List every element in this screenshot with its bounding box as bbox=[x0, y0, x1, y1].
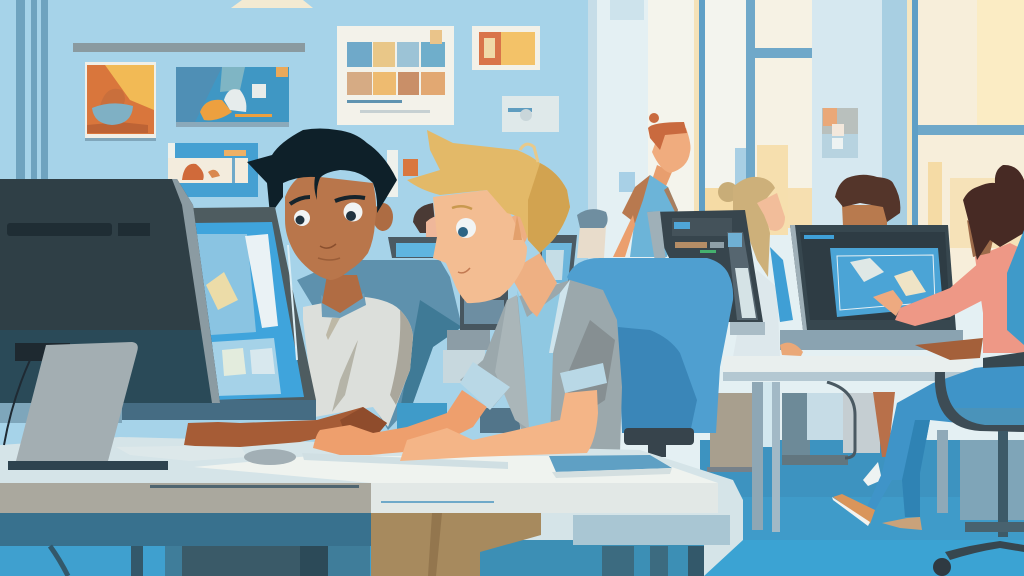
person: seated woman with blonde bun bbox=[718, 177, 793, 357]
hair bbox=[407, 130, 570, 253]
poster: swatches chart bbox=[337, 26, 454, 125]
poster: blue landscape bbox=[176, 67, 289, 127]
middle-right monitor: gallery screen bbox=[647, 210, 765, 335]
mid background chair behind dark-haired man bbox=[297, 260, 462, 431]
person: dark-haired man bbox=[247, 128, 413, 427]
shirt bbox=[303, 297, 413, 427]
trousers bbox=[371, 513, 541, 576]
right desk bbox=[723, 343, 973, 381]
window area bbox=[588, 0, 1024, 470]
ear bbox=[506, 215, 528, 247]
dark-haired man's arm bbox=[184, 407, 387, 447]
poster: orange bowl bbox=[85, 62, 156, 141]
blond man's near arm bbox=[340, 390, 487, 455]
large foreground monitor bbox=[0, 179, 220, 470]
neck bbox=[513, 253, 557, 317]
person: woman in pink pointing at screen bbox=[832, 165, 1024, 530]
floor bbox=[0, 440, 1024, 576]
main desk bbox=[0, 437, 743, 576]
small wall accents bbox=[387, 108, 858, 197]
head bbox=[433, 190, 527, 303]
leg with brown calf behind bbox=[873, 392, 895, 457]
poster: orange squares bbox=[472, 26, 540, 70]
hair bbox=[247, 128, 397, 215]
office chair: blue foreground bbox=[567, 258, 733, 457]
person: curly-haired man bbox=[835, 175, 900, 226]
large monitor: map screen bbox=[780, 225, 963, 350]
eyes bbox=[294, 210, 310, 226]
center monitor: design software bbox=[121, 207, 316, 420]
right desk lower stuff bbox=[707, 382, 1024, 532]
distant people behind monitors bbox=[413, 203, 608, 258]
blond man's far arm bbox=[400, 390, 598, 461]
legs under desk bbox=[131, 546, 143, 576]
person: standing woman bbox=[613, 113, 690, 257]
arms and hands over desk bbox=[184, 362, 607, 461]
torso bbox=[460, 280, 622, 453]
distant monitor row bbox=[388, 235, 577, 283]
office chair: right foreground bbox=[933, 230, 1024, 576]
head bbox=[285, 175, 376, 280]
person: blond man bbox=[407, 130, 622, 453]
rolled sleeves bbox=[460, 362, 510, 410]
ear bbox=[373, 203, 393, 231]
wall shelf bbox=[73, 43, 305, 52]
chair base and drawer bbox=[480, 540, 704, 576]
face bbox=[456, 218, 476, 238]
poster: lower wall print bbox=[168, 143, 258, 197]
dark-haired man's hand bbox=[313, 425, 385, 455]
poster: small note bbox=[502, 96, 559, 132]
ceiling lamp bbox=[231, 0, 313, 8]
back-row equipment between chairs bbox=[443, 283, 520, 433]
keyboard, mouse and notebook on main desk bbox=[116, 445, 672, 478]
